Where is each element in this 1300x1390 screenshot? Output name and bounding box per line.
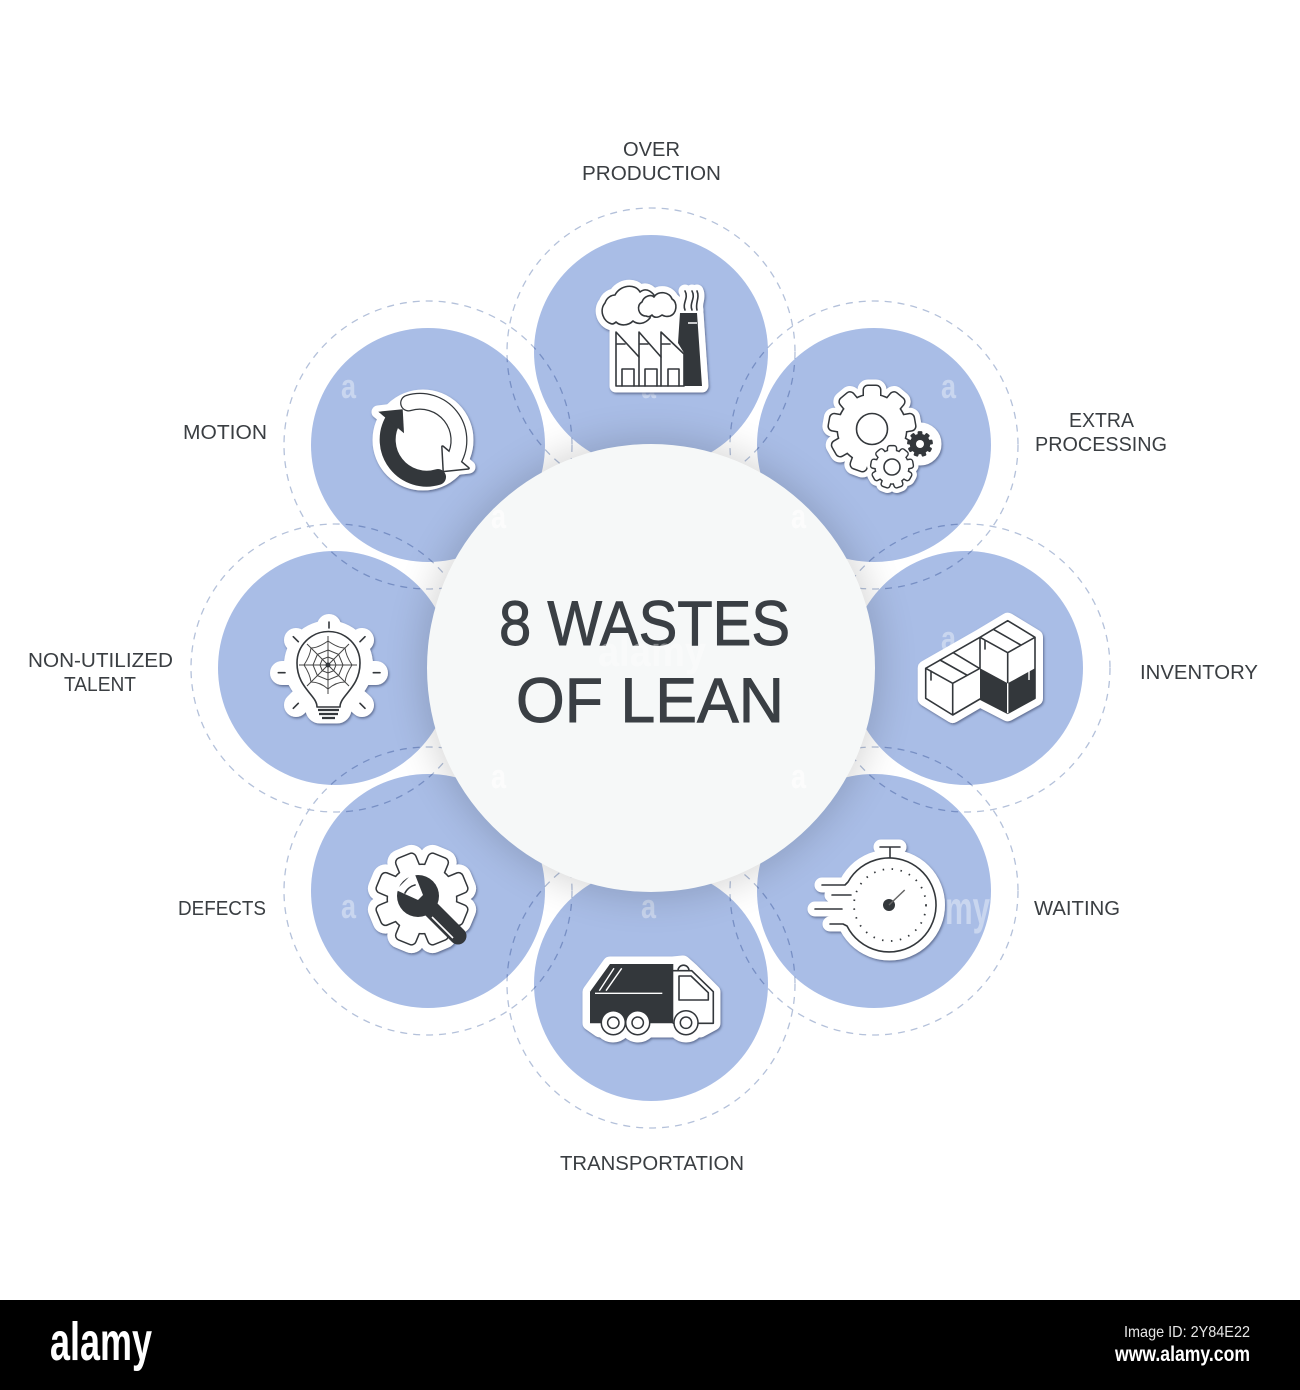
center circle [427, 444, 875, 892]
title: alamy [598, 628, 707, 675]
icon: lightbulb with web (non-utilized talent) [278, 622, 380, 718]
watermark marks: a [641, 888, 657, 926]
label: over production [582, 139, 721, 185]
label: inventory: INVENTORY [1140, 662, 1258, 684]
center watermark marks: a [491, 498, 507, 536]
label: extra processing: EXTRA [1069, 410, 1135, 432]
watermark marks [341, 368, 990, 934]
footer logo: alamy [50, 1312, 152, 1372]
icon: factory (over production) [602, 286, 702, 386]
title [499, 589, 790, 736]
title: 8 WASTES [499, 589, 790, 659]
label: defects: DEFECTS [178, 898, 266, 920]
footer url: www.alamy.com [1114, 1343, 1250, 1366]
watermark marks: a [941, 620, 957, 658]
label: transportation: TRANSPORTATION [560, 1153, 744, 1175]
watermark marks: my [945, 882, 990, 934]
center watermark marks: a [791, 758, 807, 796]
watermark marks: a [641, 368, 657, 406]
icon: truck (transportation) [590, 963, 713, 1035]
center watermark marks: a [791, 498, 807, 536]
watermark marks: a [341, 368, 357, 406]
watermark marks: a [341, 888, 357, 926]
icon: boxes (inventory) [926, 621, 1035, 715]
petal circles [218, 235, 1083, 1101]
icon: gears (extra processing) [828, 386, 935, 488]
label: non-utilized talent: TALENT [64, 674, 136, 696]
label: non-utilized talent [28, 650, 173, 696]
watermark marks: a [941, 368, 957, 406]
footer bar [0, 1300, 1300, 1390]
dashed rings [191, 208, 1110, 1128]
label: over production: OVER [623, 139, 680, 161]
footer image id: Image ID: 2Y84E22 [1124, 1324, 1250, 1341]
center watermark marks: a [491, 758, 507, 796]
label: extra processing [1035, 410, 1167, 456]
center circle shadow [423, 440, 879, 896]
center watermark marks [491, 498, 807, 796]
label: waiting: WAITING [1034, 898, 1120, 920]
label: motion: MOTION [183, 422, 267, 444]
label: extra processing: PROCESSING [1035, 434, 1167, 456]
label: non-utilized talent: NON-UTILIZED [28, 650, 173, 672]
title: OF LEAN [516, 666, 784, 736]
icon: stopwatch (waiting) [815, 847, 938, 954]
label: over production: PRODUCTION [582, 163, 721, 185]
icon: wrench in gear (defects) [376, 853, 468, 945]
icon: circular arrows (motion) [378, 396, 469, 484]
